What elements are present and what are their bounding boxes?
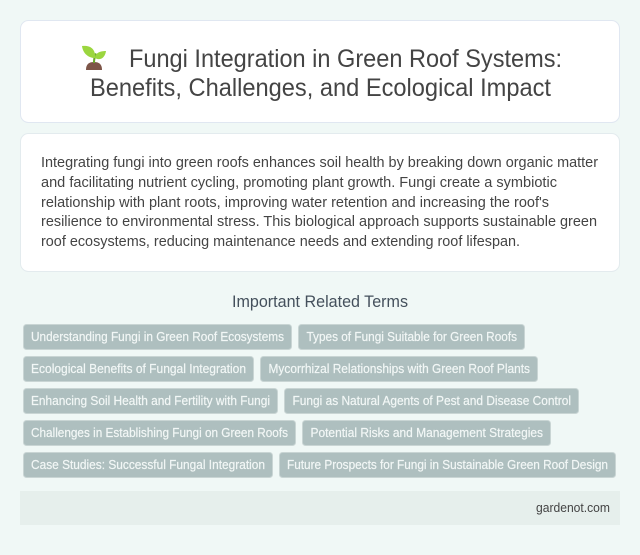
paragraph text: resilience to environmental stress. This biological approach supports sustainable green (41, 214, 597, 230)
chip: Fungi as Natural Agents of Pest and Disease Control (292, 394, 571, 408)
chip (24, 388, 278, 414)
chip (24, 324, 292, 350)
chip (280, 452, 616, 478)
chip (284, 388, 578, 414)
chip: Enhancing Soil Health and Fertility with Fungi (31, 394, 270, 408)
paragraph text: relationship with plant roots, improving water retention and increasing the roof's (41, 195, 549, 211)
title text: Fungi Integration in Green Roof Systems: (129, 45, 562, 73)
panel: summary paragraph (20, 134, 620, 272)
paragraph text: Integrating fungi into green roofs enhances soil health by breaking down organic matter (41, 155, 598, 171)
chip (298, 324, 524, 350)
chip: Case Studies: Successful Fungal Integration (31, 458, 265, 472)
chip: Future Prospects for Fungi in Sustainable Green Roof Design (287, 458, 608, 472)
panel: title (20, 20, 620, 122)
chip: Mycorrhizal Relationships with Green Roof Plants (268, 362, 530, 376)
footer (20, 491, 620, 525)
title text: Benefits, Challenges, and Ecological Impact (90, 74, 551, 102)
chip: Ecological Benefits of Fungal Integration (31, 362, 246, 376)
heading: important related terms: Important Related Terms (232, 293, 408, 311)
chip: Understanding Fungi in Green Roof Ecosystems (31, 330, 284, 344)
chip: Potential Risks and Management Strategies (310, 426, 543, 440)
paragraph text: and facilitating nutrient cycling, promoting plant growth. Fungi create a symbiotic (41, 175, 557, 191)
chip (24, 420, 296, 446)
chip (302, 420, 550, 446)
icon: seedling (82, 46, 106, 70)
paragraph text (41, 155, 598, 250)
chip: Challenges in Establishing Fungi on Green Roofs (31, 426, 288, 440)
panel: related term chips (24, 324, 616, 478)
footer site name: gardenot.com (536, 501, 610, 515)
chip (24, 356, 254, 382)
paragraph text: roof ecosystems, reducing maintenance needs and extending roof lifespan. (41, 234, 520, 250)
chip (260, 356, 538, 382)
chip (24, 452, 272, 478)
title text (90, 45, 562, 102)
chip: Types of Fungi Suitable for Green Roofs (306, 330, 517, 344)
